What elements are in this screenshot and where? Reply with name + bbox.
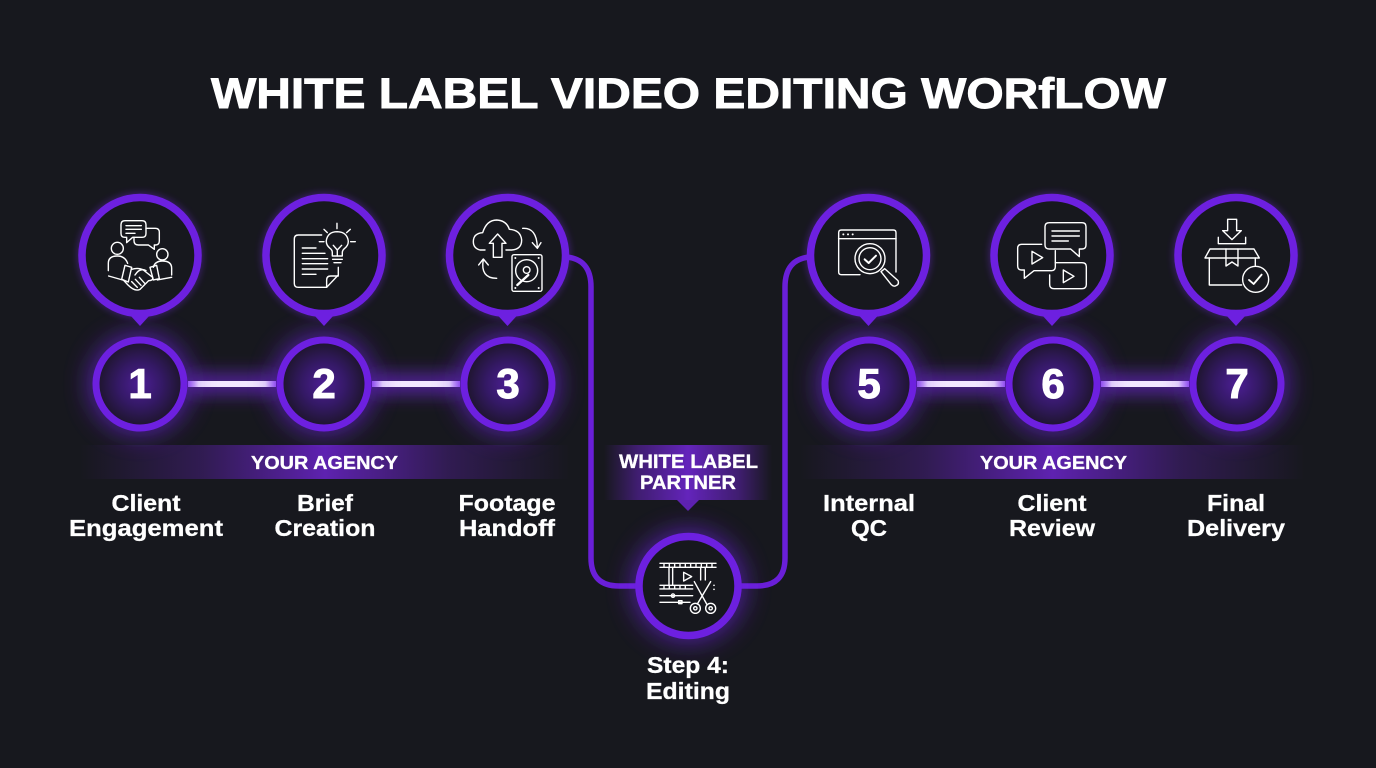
step 7 number — [1187, 334, 1287, 434]
step 7 label: Final — [1207, 490, 1265, 516]
step 6 label — [1009, 490, 1095, 541]
icon circle: step 2 — [266, 198, 382, 326]
icon circle: step 4 editing — [632, 530, 744, 642]
panel: your agency left band — [80, 445, 570, 479]
step 3 label: Handoff — [459, 515, 555, 541]
step 3 number: 3 — [496, 360, 520, 407]
step 3 label — [458, 490, 556, 541]
glowing line 6-7 — [1099, 378, 1191, 390]
label: white label partner: WHITE LABEL — [619, 452, 758, 473]
step 1 label: Engagement — [69, 515, 223, 541]
icon circle: step 6 — [994, 198, 1110, 326]
icon circle: step 7 — [1178, 198, 1294, 326]
icon circle: step 3 — [450, 198, 566, 326]
step 2 number: 2 — [312, 360, 336, 407]
icon: handshake with speech bubbles — [108, 221, 172, 290]
step 6 label: Review — [1009, 515, 1095, 541]
title: WHITE LABEL VIDEO EDITING WORfLOW — [211, 70, 1166, 118]
step 1 label — [69, 490, 223, 541]
connector: step 4 to step 5 — [739, 257, 810, 586]
step 1 number — [90, 334, 190, 434]
icon circle: step 1 — [82, 198, 198, 326]
step 4 label: Editing — [646, 678, 730, 704]
step 6 number: 6 — [1041, 360, 1065, 407]
label: your agency right: YOUR AGENCY — [980, 452, 1128, 473]
connector: step 3 to step 4 — [566, 257, 638, 586]
step 3 number — [458, 334, 558, 434]
step 2 label — [274, 490, 376, 541]
icon: brief document with lightbulb — [294, 223, 355, 287]
icon: cloud upload and hard drive — [473, 220, 542, 291]
label: your agency left: YOUR AGENCY — [251, 452, 399, 473]
step 5 label — [823, 490, 915, 541]
glowing line 2-3 — [370, 378, 462, 390]
step 4 label — [646, 652, 730, 704]
step 5 label: Internal — [823, 490, 915, 516]
step 2 label: Creation — [274, 515, 376, 541]
step 2 number — [274, 334, 374, 434]
panel: your agency right band — [800, 445, 1305, 479]
icon: film strip and scissors — [660, 563, 716, 613]
step 2 label: Brief — [297, 490, 353, 516]
step 3 label: Footage — [458, 490, 556, 516]
step 7 number: 7 — [1225, 360, 1249, 407]
icon: review chat bubbles with play buttons — [1018, 223, 1086, 289]
label: white label partner: PARTNER — [640, 473, 736, 494]
glowing line 5-6 — [915, 378, 1007, 390]
panel: white label partner — [604, 445, 772, 511]
label: white label partner — [619, 452, 758, 494]
step 5 number: 5 — [857, 360, 881, 407]
icon: package delivery with check — [1205, 219, 1269, 292]
step 7 label — [1187, 490, 1285, 541]
icon: browser window with magnifier check — [839, 230, 898, 286]
step 1 number: 1 — [128, 360, 152, 407]
icon circle: step 5 — [810, 198, 926, 326]
step 4 label: Step 4: — [647, 652, 729, 678]
step 6 label: Client — [1018, 490, 1087, 516]
step 5 label: QC — [851, 515, 887, 541]
step 1 label: Client — [112, 490, 181, 516]
step 5 number — [819, 334, 919, 434]
step 6 number — [1003, 334, 1103, 434]
glowing line 1-2 — [186, 378, 278, 390]
step 7 label: Delivery — [1187, 515, 1285, 541]
